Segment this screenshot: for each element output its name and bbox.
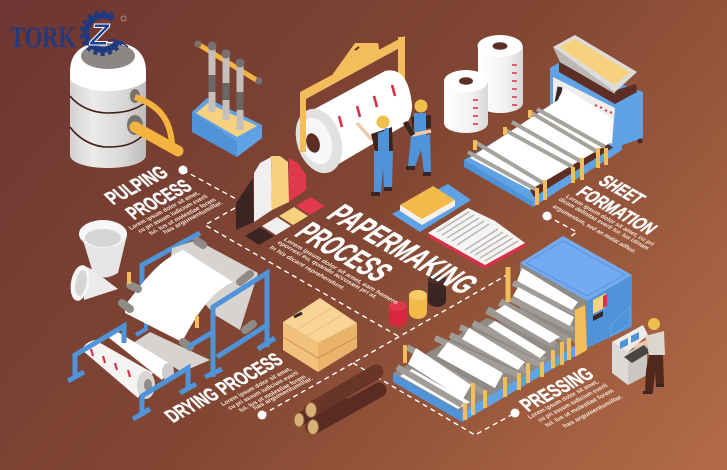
icon: logs <box>294 372 379 434</box>
blue base <box>393 318 585 422</box>
paper sheet <box>470 88 612 190</box>
icon: colour swatches <box>236 156 325 245</box>
icon: books <box>392 184 525 269</box>
icon: big paper roll on crane <box>288 36 412 179</box>
worker: right <box>405 100 431 176</box>
operator <box>645 331 665 355</box>
title body text: In his dicant reprehendunt. <box>267 245 347 291</box>
label: Drying Process: cu pri assum iudicium everti <box>226 370 301 411</box>
label: Pulping Process: cu pri assum iudicium everti <box>136 194 210 234</box>
rollers <box>122 241 253 347</box>
label: Pulping Process: has argumentumillar. <box>161 200 225 235</box>
label: Pressing: has argumentumillar. <box>561 394 625 429</box>
label: Sheet Formation <box>550 172 661 255</box>
console <box>612 342 628 385</box>
label: Pulping Process: PULPING <box>100 163 173 209</box>
white rolls <box>108 332 172 380</box>
title: Papermaking Process: PROCESS <box>287 217 401 287</box>
machine base <box>464 108 622 207</box>
label: Pulping Process: PROCESS <box>121 176 197 224</box>
yellow posts <box>405 338 569 420</box>
label: Sheet Formation: Lorem ipsum dolor sit amet, cu pri <box>563 194 656 247</box>
rollers and sheets <box>397 268 578 405</box>
logo: Tork Z: Z <box>89 17 110 52</box>
label: Sheet Formation: FORMATION <box>571 183 661 238</box>
label: Pulping Process <box>100 163 225 236</box>
icon: pressing machine <box>393 236 632 422</box>
icon: workers <box>357 100 431 196</box>
label: Drying Process: DRYING PROCESS <box>160 350 288 427</box>
yellow book on blue clipboard <box>392 184 471 232</box>
logo: Tork Z <box>10 12 128 54</box>
label: Sheet Formation: argumentum, sed an mutat adhuc. <box>550 204 639 255</box>
icon: operator at console <box>612 318 665 394</box>
label: Pulping Process: tui. Ius ut molestiae forem <box>147 197 218 236</box>
icon: paper cups <box>68 220 127 302</box>
front frame <box>188 273 275 377</box>
icon: paper rolls <box>444 35 523 133</box>
title: Papermaking Process: PAPERMAKING <box>319 199 486 300</box>
logo: Tork Z: TORK <box>10 21 76 54</box>
icon: vat with rods <box>192 40 262 157</box>
icon: sheet formation machine <box>464 35 643 207</box>
icon: drying machine <box>68 233 275 419</box>
rear frame <box>142 233 200 290</box>
dashed connector lines <box>178 166 577 435</box>
label: Pressing: tui. Ius ut molestiae forem <box>543 388 616 428</box>
label: Sheet Formation: dicam definitas everti tur. Ius utinam <box>556 197 651 251</box>
label: Drying Process: Lorem ipsum dolor sit amet, <box>219 366 294 407</box>
lower frame <box>68 326 196 419</box>
label: Drying Process <box>160 350 315 427</box>
worker: left <box>357 116 393 196</box>
label: Sheet Formation: SHEET <box>593 172 649 208</box>
label: Pressing: PRESSING <box>515 364 599 416</box>
title body text: eporrexi eu, quando accusam pri at. <box>275 240 379 300</box>
hopper <box>553 35 637 104</box>
title body text: Lorem ipsum dolor sit amet, eam homero <box>281 237 400 305</box>
paper sheets <box>170 240 258 330</box>
yellow posts <box>475 110 606 205</box>
label: Drying Process: tui. Ius ut molestiae forem <box>237 374 308 413</box>
icon: colour cylinders <box>389 274 446 327</box>
label: Pressing: Lorem ipsum dolor sit amet, <box>526 379 601 420</box>
icon: cardboard boxes <box>283 298 357 372</box>
label: Pressing: cu pri assum iudicium everti <box>536 383 610 423</box>
rollers <box>468 109 605 190</box>
label: Pressing <box>515 364 625 429</box>
open book <box>428 208 525 269</box>
icon: pulping tank <box>70 42 178 168</box>
label: Pulping Process: Lorem ipsum dolor sit amet, <box>127 190 202 231</box>
machine head <box>550 62 643 148</box>
title: Papermaking Process <box>267 199 486 305</box>
label: Drying Process: has argumentumillar. <box>251 376 315 411</box>
blue cabinet <box>520 236 632 348</box>
